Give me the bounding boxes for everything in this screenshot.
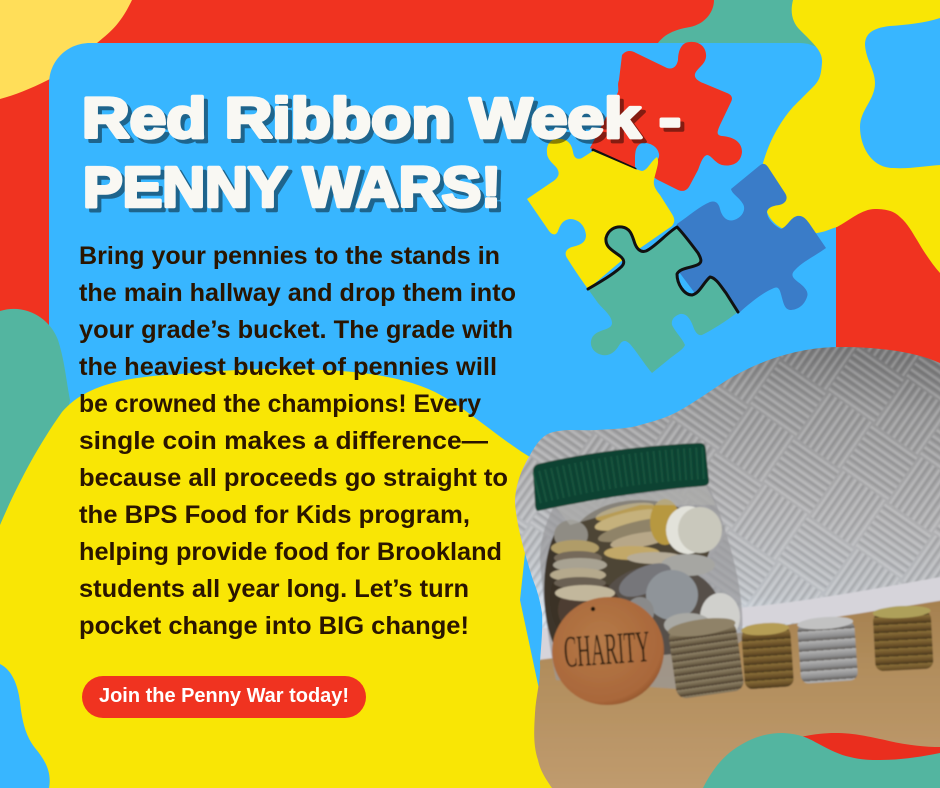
background: red sliver bottom right (800, 733, 940, 775)
photo towel (505, 576, 940, 660)
jar glass (540, 482, 743, 690)
puzzle: dark blue piece (670, 164, 826, 312)
body text: because all proceeds go straight to (79, 464, 508, 492)
title (82, 86, 681, 220)
body text: pocket change into BIG change! (79, 612, 469, 640)
blue blob inside yellow (860, 18, 940, 168)
panel: blue main panel (49, 43, 836, 788)
body text: helping provide food for Brookland (79, 538, 502, 566)
body text (79, 242, 516, 640)
background: yellow lower blob (0, 369, 560, 788)
background: yellow right blob (763, 0, 940, 273)
puzzle: teal piece with black outline (588, 227, 738, 373)
jar neck highlight (555, 486, 716, 525)
coin stack 2 (741, 621, 794, 690)
photo table (505, 600, 940, 788)
coin stack 3 (797, 615, 858, 684)
title: PENNY WARS! (83, 156, 501, 220)
body text: the main hallway and drop them into (79, 279, 516, 307)
call-to-action button: Join the Penny War today! (99, 685, 349, 707)
body text: Bring your pennies to the stands in (79, 242, 500, 270)
jar coins (544, 499, 740, 660)
body text: be crowned the champions! Every (79, 390, 481, 418)
background: teal left blob (0, 309, 70, 560)
coin stack 4 (872, 605, 934, 671)
jar lid (533, 443, 709, 511)
body text: the heaviest bucket of pennies will (79, 353, 497, 381)
background: teal top blob (654, 0, 830, 60)
title: Red Ribbon Week - (82, 86, 681, 150)
puzzle: black line on red piece (593, 150, 635, 169)
body text: students all year long. Let’s turn (79, 575, 469, 603)
background: pale yellow corner blob (0, 0, 132, 99)
body text: the BPS Food for Kids program, (79, 501, 470, 529)
photo wall (515, 347, 940, 634)
puzzle: yellow piece (527, 139, 674, 289)
background: blue lower-left blob (0, 664, 50, 788)
black outline (588, 227, 738, 312)
photo: charity coin jar (500, 340, 940, 788)
coin stack 1 (667, 615, 745, 699)
puzzle: red piece (590, 42, 742, 191)
background: teal bottom right blob (703, 733, 940, 788)
body text: single coin makes a difference— (79, 427, 488, 455)
jar (533, 443, 743, 690)
body text: your grade’s bucket. The grade with (79, 316, 513, 344)
call-to-action button (82, 676, 366, 718)
wooden charity tag (551, 596, 665, 706)
wooden charity tag: CHARITY (562, 621, 651, 677)
